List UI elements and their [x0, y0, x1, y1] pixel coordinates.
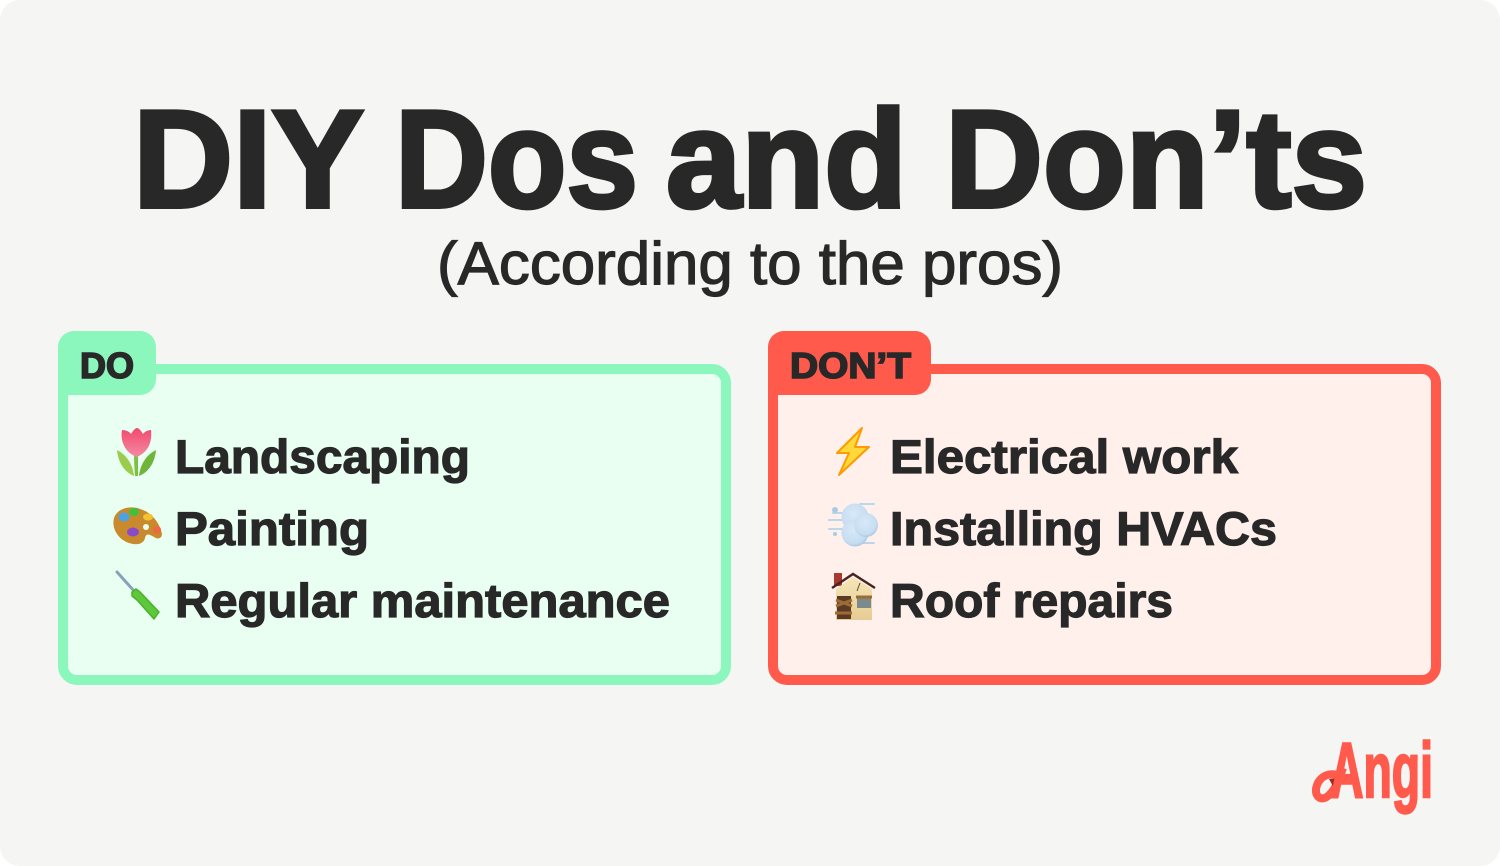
logo: Angi — [1316, 726, 1433, 814]
list item: regular maintenance: Regular maintenance — [175, 574, 670, 627]
tab label: do: DO — [80, 345, 134, 386]
list item: landscaping: Landscaping — [175, 430, 470, 483]
tab: don't — [768, 331, 931, 395]
tab label: don't: DON’T — [790, 345, 911, 386]
title — [133, 82, 1367, 237]
panel: don't — [768, 331, 1436, 680]
title: DIY — [133, 82, 364, 237]
subtitle: (According to the pros) — [437, 230, 1063, 297]
list item: installing hvacs: Installing HVACs — [890, 502, 1277, 555]
list item: roof repairs: Roof repairs — [890, 574, 1173, 627]
title: and — [666, 82, 907, 237]
logo: Angi: Angi — [1330, 726, 1433, 814]
list item: electrical work: Electrical work — [890, 430, 1239, 483]
icon: wind cloud — [829, 504, 878, 546]
tab: do — [58, 331, 156, 395]
icon: palette — [113, 507, 162, 544]
icon: tulip — [117, 428, 156, 476]
panel: do — [58, 331, 726, 680]
icon: screwdriver — [117, 572, 159, 619]
title: Dos — [395, 82, 638, 237]
title: Don’ts — [945, 82, 1367, 237]
icon: lightning bolt — [837, 428, 869, 475]
icon: derelict house — [832, 573, 875, 620]
list item: painting: Painting — [175, 502, 369, 555]
